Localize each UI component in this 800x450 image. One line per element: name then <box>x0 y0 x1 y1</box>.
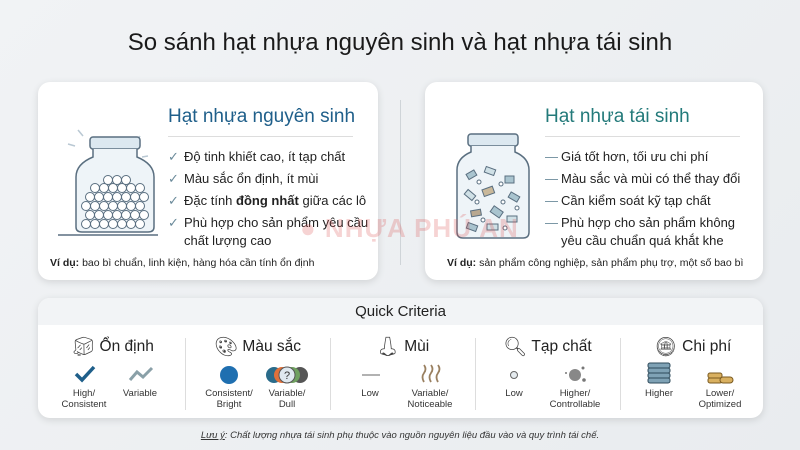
column: stability: 🧊︎ Ổn định <box>71 337 154 358</box>
column: impurities <box>503 336 600 410</box>
column: stability: Consistent <box>62 399 106 410</box>
column: odor: 👃︎ Mùi <box>376 337 429 358</box>
icon: color dots <box>266 366 308 384</box>
list: virgin benefits: Đặc tính đồng nhất giữa các lô <box>184 193 366 208</box>
column: impurities: Higher/ <box>560 388 590 399</box>
divider vertical <box>400 100 401 265</box>
title: So sánh hạt nhựa nguyên sinh và hạt nhựa tái sinh <box>128 29 672 56</box>
list: recycled traits: — <box>545 149 558 164</box>
watermark: ● NHỰA PHÚ AN <box>300 213 519 243</box>
column: odor: Noticeable <box>408 399 452 410</box>
icon: low line <box>362 374 380 376</box>
column: odor: Variable/ <box>412 388 448 399</box>
list: recycled traits: Cần kiểm soát kỹ tạp chất <box>561 193 711 208</box>
column: cost: Higher <box>645 388 673 399</box>
column: stability: High/ <box>73 388 95 399</box>
column: stability <box>62 336 157 410</box>
column: color: Dull <box>279 399 295 410</box>
column: color: Variable/ <box>269 388 305 399</box>
note: Lưu ý: Chất lượng nhựa tái sinh phụ thuộc vào nguồn nguyên liệu đầu vào và quy trình tái chế. <box>201 430 599 441</box>
list: recycled traits: — <box>545 215 558 230</box>
list: recycled traits: — <box>545 171 558 186</box>
column: odor: Low <box>361 388 379 399</box>
column: cost <box>645 337 741 410</box>
panel: quick criteria <box>38 298 763 418</box>
column: cost: Optimized <box>699 399 741 410</box>
column: color <box>205 336 308 410</box>
list: virgin benefits: Phù hợp cho sản phẩm yêu cầu <box>184 215 368 230</box>
list: virgin benefits: ✓ <box>168 171 179 186</box>
column: impurities: 🔍︎ Tạp chất <box>503 337 592 358</box>
icon: dots <box>565 366 586 382</box>
panel: virgin plastic <box>38 82 378 280</box>
column: impurities: Low <box>505 388 523 399</box>
icon: jar with pellets <box>58 130 158 236</box>
icon: small coin stack <box>708 372 734 384</box>
icon: blue dot <box>220 366 238 384</box>
list: virgin benefits: ✓ <box>168 215 179 230</box>
list: recycled traits <box>545 149 740 248</box>
list: virgin benefits: Màu sắc ổn định, ít mùi <box>184 171 318 186</box>
text: virgin example: Ví dụ: bao bì chuẩn, linh kiện, hàng hóa cần tính ổn định <box>50 257 314 269</box>
list: virgin benefits: ✓ <box>168 193 179 208</box>
icon: wave <box>129 367 153 381</box>
column: stability: Variable <box>123 388 157 399</box>
icon: tall coin stack <box>648 362 670 384</box>
list: recycled traits: Màu sắc và mùi có thể thay đổi <box>561 171 740 186</box>
list: virgin benefits <box>168 149 368 248</box>
list: recycled traits: yêu cầu chuẩn quá khắt khe <box>561 233 724 248</box>
column: color: Bright <box>217 399 241 410</box>
list: recycled traits: Giá tốt hơn, tối ưu chi phí <box>561 149 708 164</box>
column: odor <box>361 336 452 410</box>
icon: small dot <box>510 371 518 379</box>
heading: virgin: Hạt nhựa nguyên sinh <box>168 106 355 127</box>
icon: jar with flakes <box>456 133 530 239</box>
heading: quick criteria: Quick Criteria <box>355 303 446 320</box>
list: recycled traits: — <box>545 193 558 208</box>
list: recycled traits: Phù hợp cho sản phẩm không <box>561 215 735 230</box>
icon: odor waves <box>422 364 440 382</box>
panel: recycled plastic <box>425 82 763 280</box>
column: cost: Lower/ <box>706 388 734 399</box>
list: virgin benefits: chất lượng cao <box>184 233 271 248</box>
icon: color dots: ? <box>284 370 290 382</box>
column: color: 🎨︎ Màu sắc <box>214 337 301 358</box>
text: recycled example: Ví dụ: sản phẩm công nghiệp, sản phẩm phụ trợ, một số bao bì <box>447 257 743 269</box>
column: color: Consistent/ <box>205 388 253 399</box>
heading: recycled: Hạt nhựa tái sinh <box>545 106 690 127</box>
column: cost: 🪙︎ Chi phí <box>654 337 731 358</box>
list: virgin benefits: ✓ <box>168 149 179 164</box>
column: impurities: Controllable <box>550 399 600 410</box>
icon: check <box>74 366 96 382</box>
list: virgin benefits: Độ tinh khiết cao, ít tạp chất <box>184 149 345 164</box>
heading: quick criteria <box>38 298 763 325</box>
